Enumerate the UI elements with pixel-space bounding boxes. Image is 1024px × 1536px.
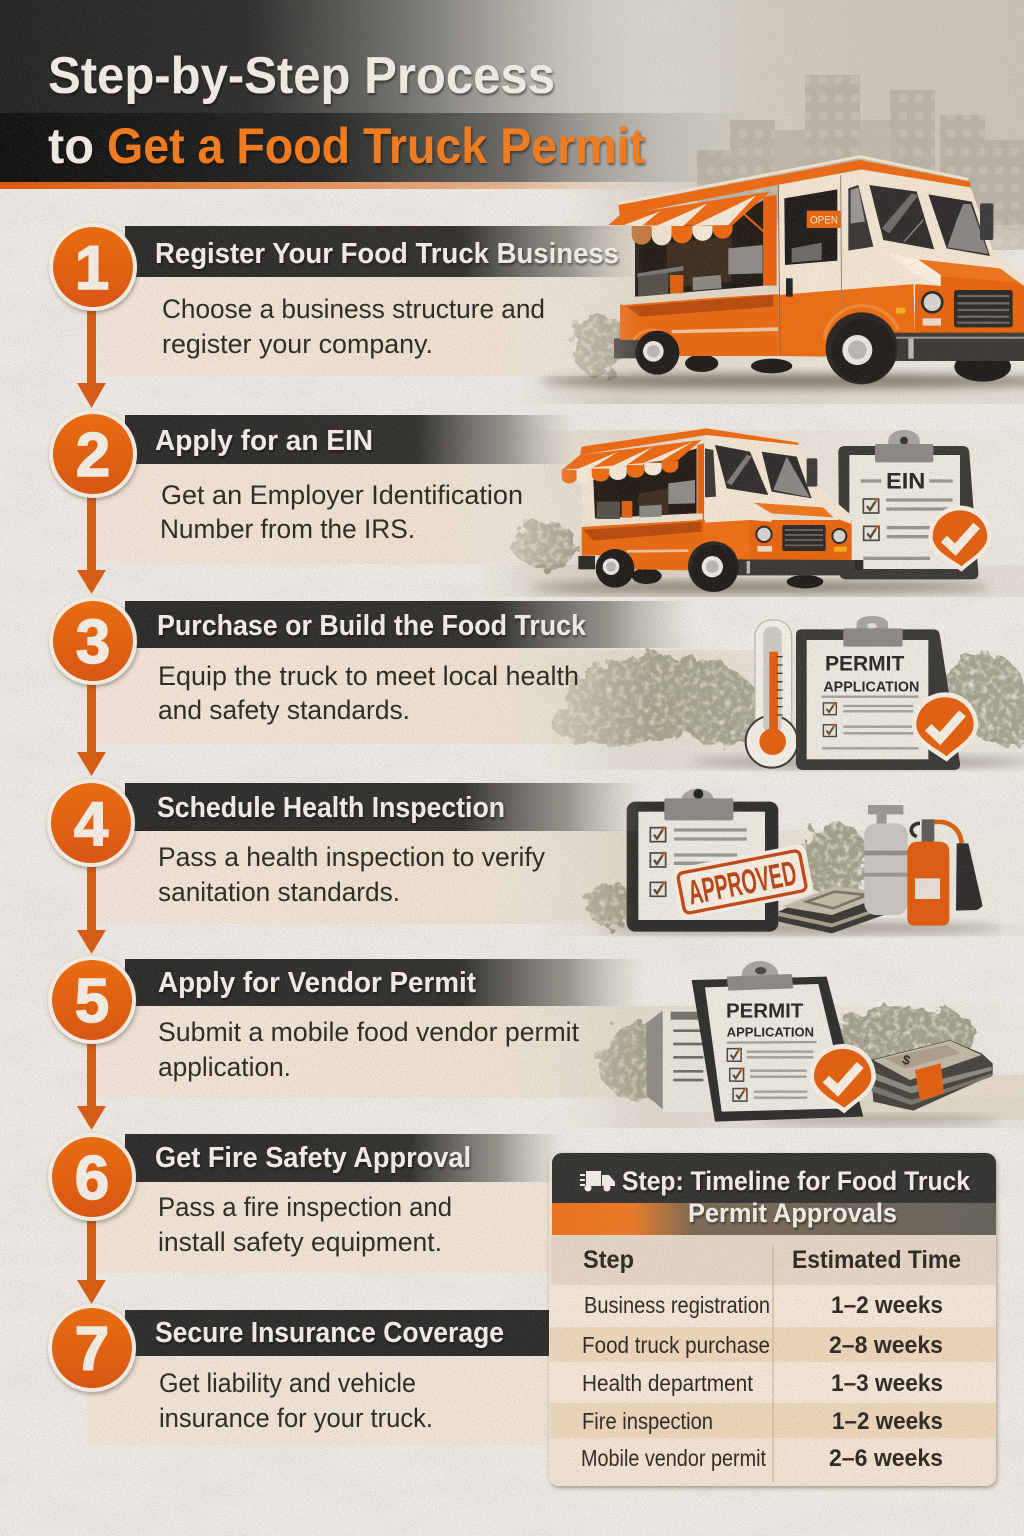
step 3 body panel xyxy=(92,648,652,744)
number badge 6: 6 xyxy=(75,1144,109,1213)
row: business registration: 1–2 weeks xyxy=(831,1292,943,1319)
table title xyxy=(622,1166,971,1228)
number badge 3 xyxy=(49,597,137,685)
step 3 description: and safety standards. xyxy=(158,695,410,725)
panel: step 3 xyxy=(92,601,695,744)
illustration: second food truck xyxy=(562,428,863,592)
illustration: thermometer xyxy=(746,620,798,768)
arrow: step 2 to 3 xyxy=(77,492,106,594)
arrow: step 6 to 7 xyxy=(77,1215,106,1304)
illustration: stack of cash and fire extinguishers xyxy=(778,805,983,933)
row: business registration xyxy=(550,1285,996,1327)
step 1 description: Choose a business structure and xyxy=(162,294,545,324)
illustration: approved stamp xyxy=(670,843,814,920)
illustration: main food truck: OPEN xyxy=(810,214,838,226)
title xyxy=(48,47,645,174)
header banner xyxy=(0,0,760,189)
table title: Permit Approvals xyxy=(688,1198,897,1228)
arrow: step 1 to 2 xyxy=(77,305,106,408)
step 4 heading: Schedule Health Inspection xyxy=(157,792,505,824)
step 7 title bar xyxy=(125,1310,555,1356)
column header row: Step xyxy=(583,1246,634,1274)
step 5 body panel xyxy=(92,1006,652,1098)
row: fire inspection: Fire inspection xyxy=(582,1408,713,1434)
skyline backdrop xyxy=(560,0,1024,250)
step 2 heading: Apply for an EIN xyxy=(155,425,373,457)
illustration: vendor permit documents and money: APPLICATION xyxy=(727,1025,814,1040)
column header row xyxy=(551,1235,996,1285)
row: business registration: Business registration xyxy=(584,1292,770,1318)
number badge 1: 1 xyxy=(75,234,109,303)
step 7 heading: Secure Insurance Coverage xyxy=(155,1317,504,1349)
number badge 5: 5 xyxy=(75,967,109,1036)
step 3 title bar xyxy=(125,601,695,648)
number badge 5 xyxy=(48,956,136,1044)
step 7 description: insurance for your truck. xyxy=(159,1403,433,1433)
step 2 description xyxy=(160,480,523,544)
step 7 body panel xyxy=(88,1356,550,1445)
row: food truck purchase xyxy=(550,1327,996,1362)
step 6 description xyxy=(158,1192,452,1257)
step 3 description xyxy=(158,661,579,725)
arrow: step 5 to 6 xyxy=(77,1038,106,1130)
step 5 description: Submit a mobile food vendor permit xyxy=(158,1017,579,1047)
row: food truck purchase: 2–8 weeks xyxy=(829,1332,943,1359)
step 5 description xyxy=(158,1017,579,1082)
scene backdrop and ground: row 1 xyxy=(520,225,1024,404)
card body xyxy=(549,1153,996,1486)
number badge 4 xyxy=(47,779,135,867)
scene backdrop and ground: row 4 xyxy=(490,822,1024,936)
column header row: Estimated Time xyxy=(792,1246,961,1274)
panel: step 5 xyxy=(92,959,652,1098)
illustration: main food truck xyxy=(608,157,1024,384)
step 2 description: Number from the IRS. xyxy=(160,514,415,544)
table title: Step: Timeline for Food Truck xyxy=(622,1166,971,1196)
row: mobile vendor permit xyxy=(549,1438,996,1486)
title: to xyxy=(48,118,94,174)
title: Get a Food Truck Permit xyxy=(107,118,645,174)
arrow: step 4 to 5 xyxy=(77,860,106,954)
step 3 description: Equip the truck to meet local health xyxy=(158,661,579,691)
step 6 body panel xyxy=(92,1182,550,1273)
step 7 description xyxy=(159,1368,433,1433)
illustration: approved clipboard xyxy=(627,789,778,932)
step 2 description: Get an Employer Identification xyxy=(161,480,523,510)
step 2 title bar xyxy=(125,415,575,464)
row: mobile vendor permit: 2–6 weeks xyxy=(829,1445,943,1472)
scene backdrop, bushes and ground: row 5 xyxy=(490,1006,1024,1128)
step 1 description: register your company. xyxy=(162,329,433,359)
illustration: EIN clipboard with check badge xyxy=(838,430,992,579)
step 3 heading: Purchase or Build the Food Truck xyxy=(157,610,587,642)
number badge 7 xyxy=(48,1304,136,1392)
illustration: EIN clipboard with check badge: EIN xyxy=(886,468,925,493)
step 6 description: install safety equipment. xyxy=(158,1227,442,1257)
table header banner xyxy=(552,1153,996,1235)
step 6 description: Pass a fire inspection and xyxy=(158,1192,452,1222)
step 1 description xyxy=(162,294,545,359)
step 5 description: application. xyxy=(158,1052,291,1082)
illustration: approved stamp: APPROVED xyxy=(685,854,800,913)
illustration: permit application clipboard: PERMIT xyxy=(825,652,904,676)
number badge 2 xyxy=(49,410,137,498)
step 2 body panel xyxy=(92,464,582,564)
number badge 3: 3 xyxy=(76,608,110,677)
step 1 heading: Register Your Food Truck Business xyxy=(155,238,619,270)
row: health department: Health department xyxy=(582,1370,754,1396)
arrow: step 3 to 4 xyxy=(77,678,106,776)
number badge 4: 4 xyxy=(74,790,109,859)
step 6 title bar xyxy=(125,1134,565,1182)
title: Step-by-Step Process xyxy=(48,47,555,105)
number badge 6 xyxy=(48,1133,136,1221)
icon: delivery truck xyxy=(580,1171,615,1192)
scene backdrop and ground: row 2 xyxy=(480,430,1024,597)
illustration: vendor permit documents and money xyxy=(646,961,993,1122)
panel: step 2 xyxy=(92,415,582,564)
step 1 title bar xyxy=(125,226,645,277)
number badge 2: 2 xyxy=(76,421,110,490)
row: fire inspection: 1–2 weeks xyxy=(832,1408,943,1435)
step 7 description: Get liability and vehicle xyxy=(159,1368,416,1398)
step 5 title bar xyxy=(125,959,645,1006)
illustration: permit application clipboard: APPLICATION xyxy=(823,680,919,696)
timeline table card xyxy=(549,1153,996,1486)
step 4 title bar xyxy=(125,783,645,831)
panel: step 6 xyxy=(92,1134,565,1273)
row: fire inspection xyxy=(550,1403,996,1438)
panel: step 1 xyxy=(97,226,645,376)
illustration: vendor permit documents and money: PERMIT xyxy=(726,999,804,1022)
step 4 body panel xyxy=(92,831,632,924)
panel: step 7 xyxy=(88,1310,555,1445)
number badge 7: 7 xyxy=(75,1315,109,1384)
step 4 description: sanitation standards. xyxy=(158,877,400,907)
step 1 body panel xyxy=(97,277,642,376)
scene backdrop, bushes and ground: row 3 xyxy=(480,650,1024,770)
row: mobile vendor permit: Mobile vendor permit xyxy=(581,1445,767,1471)
step 5 heading: Apply for Vendor Permit xyxy=(158,967,476,999)
illustration: permit application clipboard xyxy=(796,616,978,770)
step 4 description xyxy=(158,842,545,907)
row: food truck purchase: Food truck purchase xyxy=(582,1332,770,1358)
illustration: vendor permit documents and money: $ xyxy=(901,1052,912,1068)
panel: step 4 xyxy=(92,783,645,924)
row: health department xyxy=(550,1362,996,1403)
row: health department: 1–3 weeks xyxy=(831,1370,943,1397)
number badge 1 xyxy=(49,223,137,311)
step 4 description: Pass a health inspection to verify xyxy=(158,842,545,872)
step 6 heading: Get Fire Safety Approval xyxy=(155,1142,471,1174)
